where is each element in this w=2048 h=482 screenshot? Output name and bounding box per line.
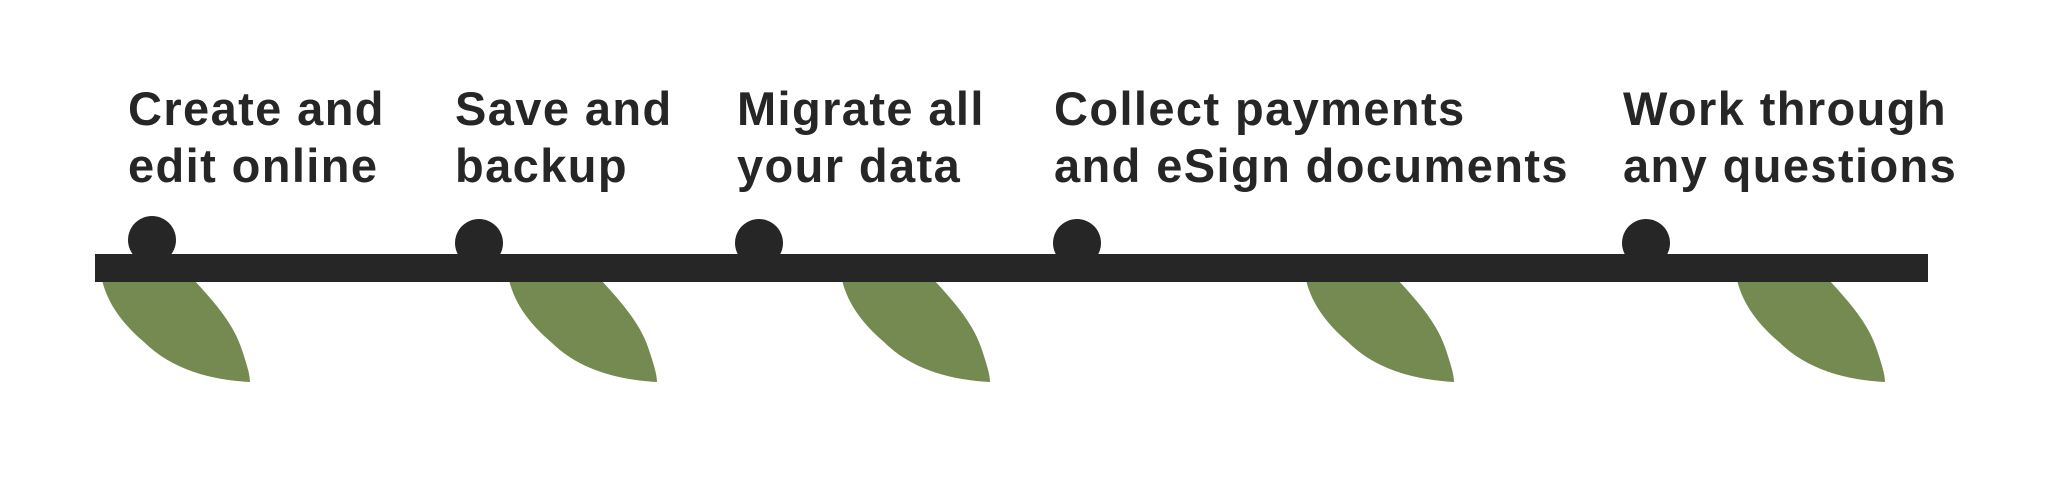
label 5: Work through	[1623, 82, 1947, 135]
label 3: Migrate all	[737, 82, 985, 135]
timeline bar	[95, 254, 1928, 282]
label 4: and eSign documents	[1054, 139, 1569, 192]
label 1	[128, 82, 385, 192]
label 5	[1623, 82, 1957, 192]
label 4: Collect payments	[1054, 82, 1466, 135]
label 4	[1054, 82, 1569, 192]
label 1: Create and	[128, 82, 385, 135]
label 2: Save and	[455, 82, 673, 135]
label 3	[737, 82, 985, 192]
label 2: backup	[455, 139, 628, 192]
milestone dots	[128, 216, 1670, 267]
label 2	[455, 82, 673, 192]
label 5: any questions	[1623, 139, 1957, 192]
leaves	[102, 280, 1885, 382]
label 3: your data	[737, 139, 961, 192]
label 1: edit online	[128, 139, 378, 192]
